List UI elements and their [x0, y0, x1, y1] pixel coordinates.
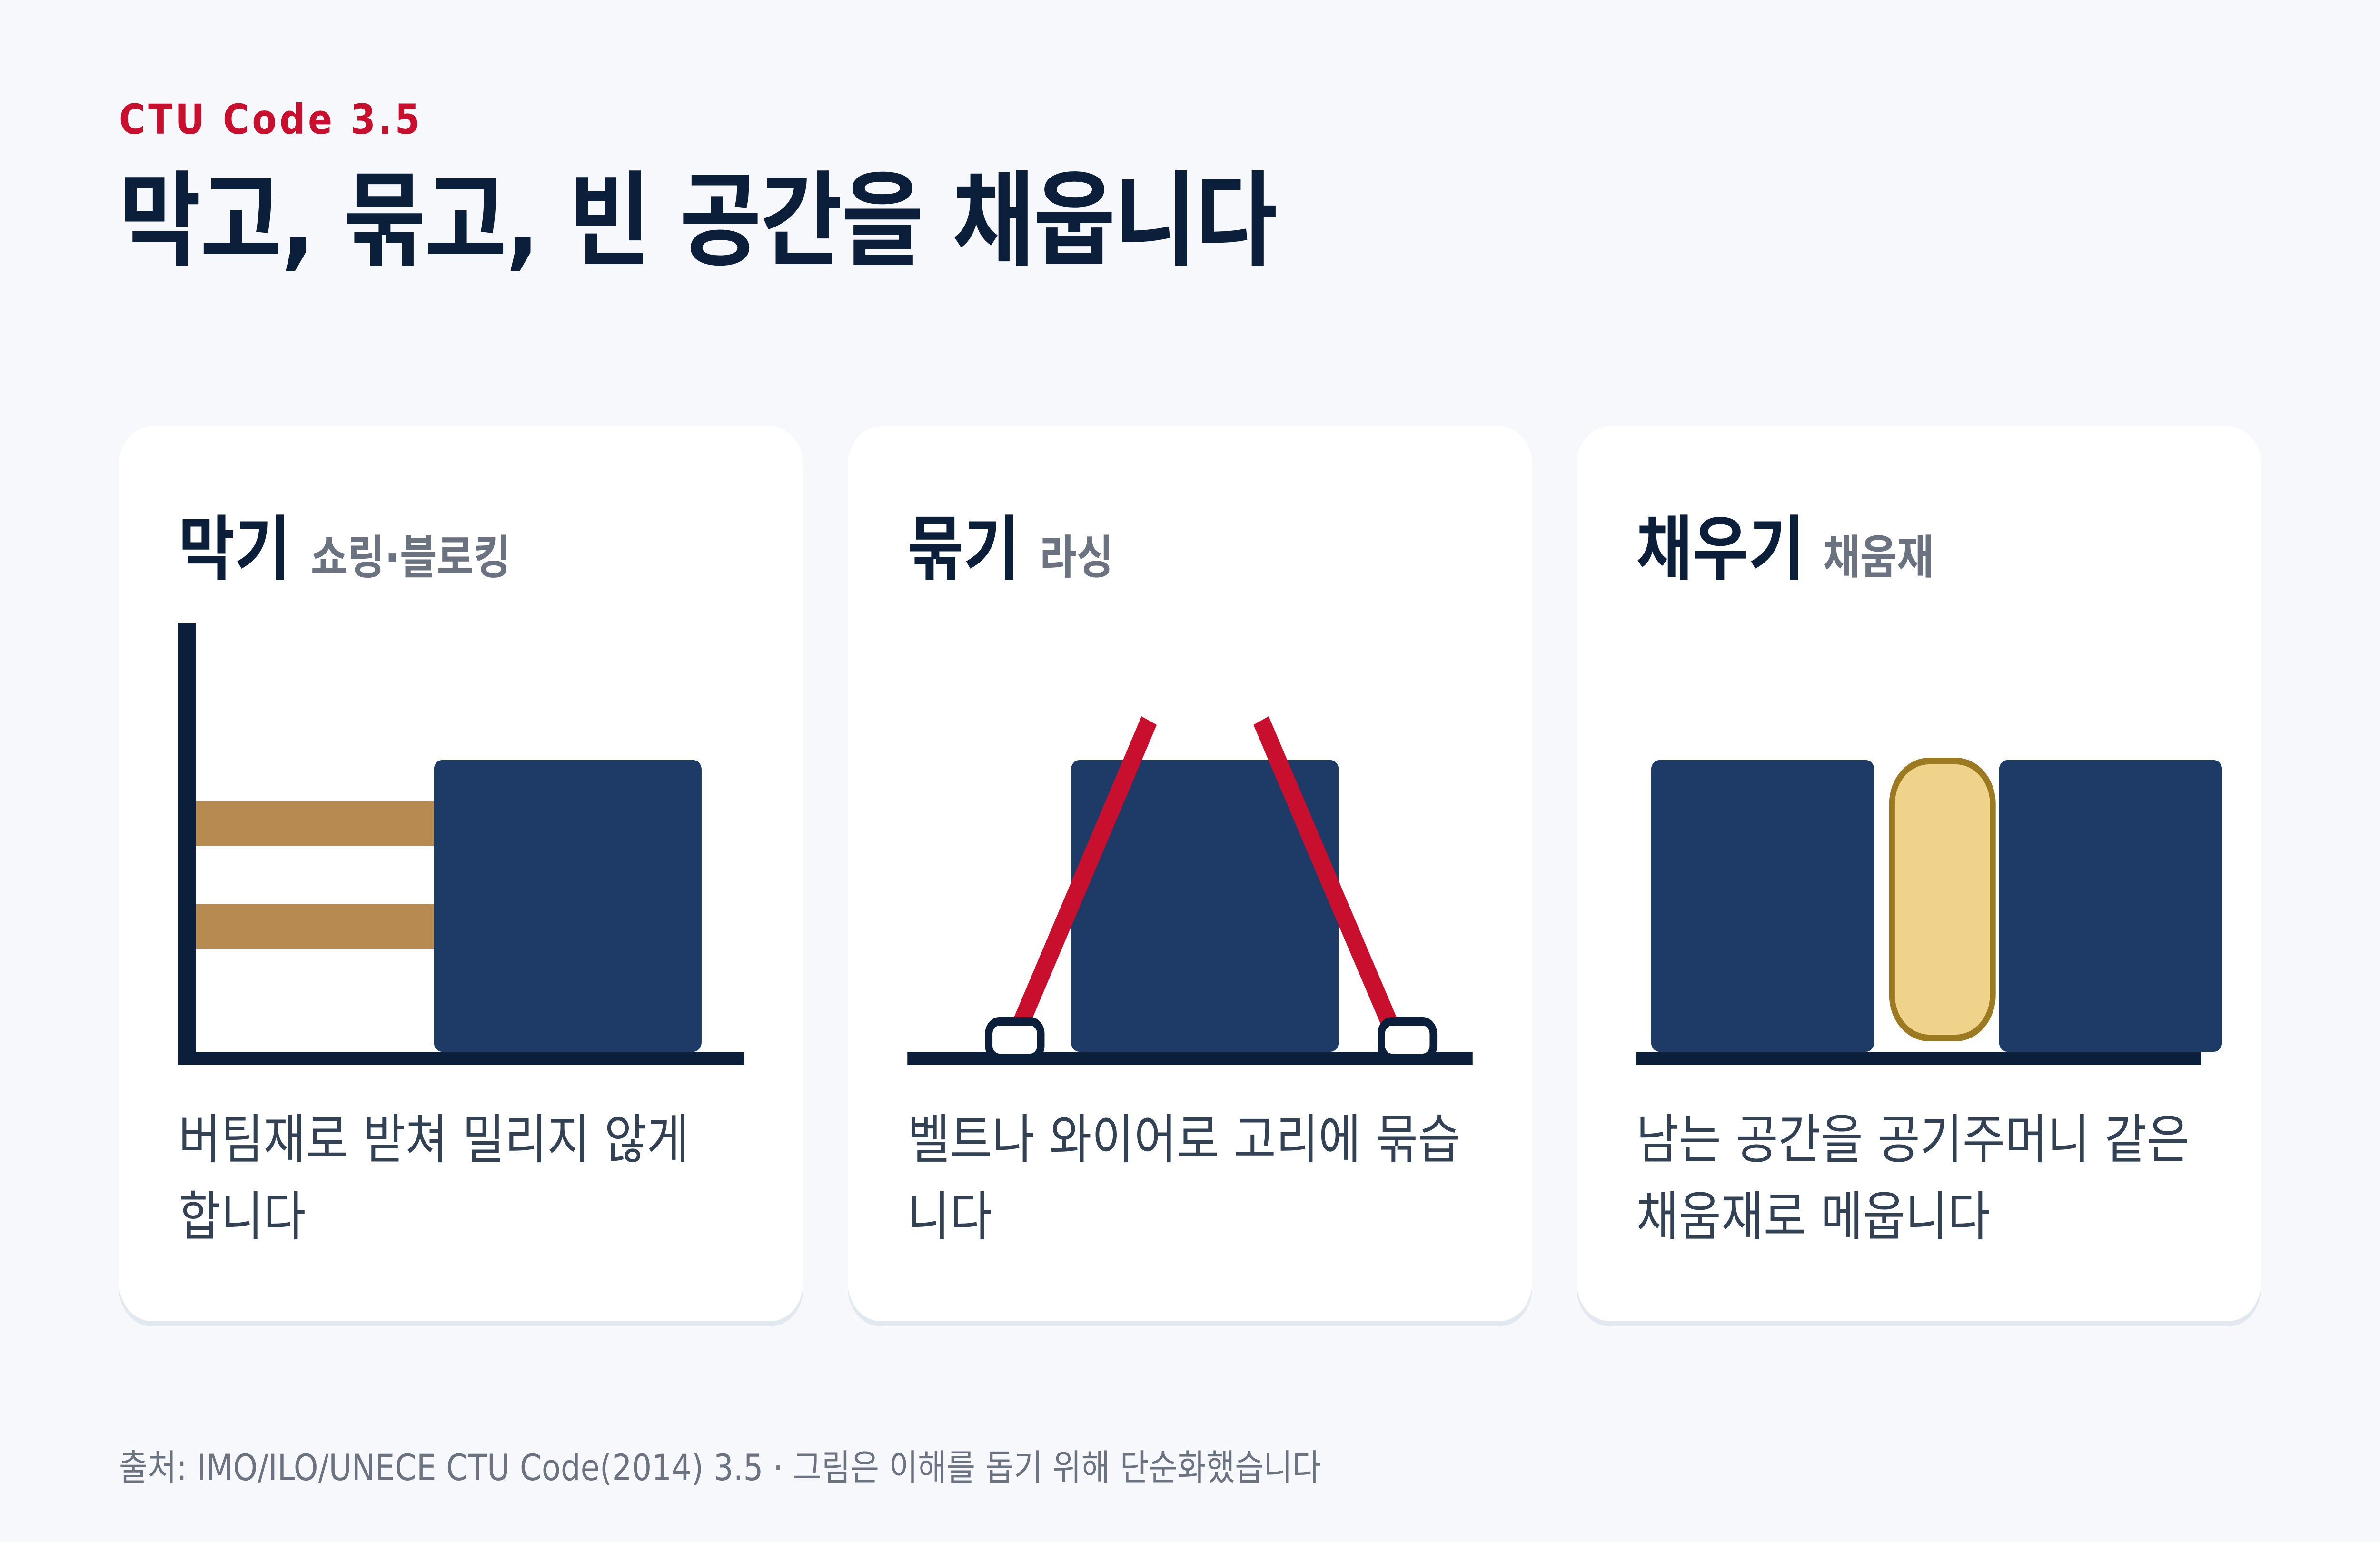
wall and floor [178, 623, 744, 1065]
panel heading: 묶기 라싱: 묶기 [907, 508, 1020, 590]
description text [1636, 1108, 2189, 1248]
panel heading: 채우기 채움재: 채움재 [1823, 531, 1934, 584]
air bag [1892, 761, 1993, 1038]
anchor hooks [989, 1021, 1433, 1058]
panel: 채우기 dunnage [1577, 426, 2261, 1326]
panel heading: 묶기 라싱 [907, 508, 1113, 590]
panel: 막기 shoring and blocking [119, 426, 803, 1326]
floor [1636, 1052, 2202, 1065]
panel heading: 막기 쇼링·블로킹 [178, 508, 511, 590]
description text: 벨트나 와이어로 고리에 묶습 [907, 1108, 1460, 1171]
description text: 채움재로 메웁니다 [1636, 1186, 1990, 1248]
cargo box right [1999, 760, 2222, 1052]
cargo box [434, 760, 702, 1052]
source footnote: 출처: IMO/ILO/UNECE CTU Code(2014) 3.5 · 그림은 이해를 돕기 위해 단순화했습니다 [119, 1447, 1321, 1489]
illustration: dunnage bag between two cargo boxes [1636, 760, 2222, 1065]
description text: 남는 공간을 공기주머니 같은 [1636, 1108, 2189, 1171]
eyebrow: CTU Code 3.5: CTU Code 3.5 [119, 96, 423, 144]
panel heading: 묶기 라싱: 라싱 [1040, 531, 1113, 584]
description text: 니다 [907, 1186, 992, 1248]
timber braces [196, 801, 436, 949]
illustration: cargo braced against a wall with timber [178, 623, 744, 1065]
title: 막고, 묶고, 빈 공간을 채웁니다 [119, 161, 1276, 281]
cargo box left [1651, 760, 1874, 1052]
cargo box [1071, 760, 1339, 1052]
panel heading: 막기 쇼링·블로킹: 막기 [178, 508, 291, 590]
lashing straps [1015, 721, 1396, 1038]
panel heading: 채우기 채움재: 채우기 [1636, 508, 1805, 590]
floor [907, 1052, 1473, 1065]
description text: 버팀재로 받쳐 밀리지 않게 [178, 1108, 689, 1171]
description text [907, 1108, 1460, 1248]
panel heading: 막기 쇼링·블로킹: 쇼링·블로킹 [311, 531, 511, 584]
description text [178, 1108, 689, 1248]
panel: 묶기 lashing [848, 426, 1532, 1326]
illustration: cargo lashed to floor anchors [907, 721, 1473, 1065]
panel heading: 채우기 채움재 [1636, 508, 1934, 590]
description text: 합니다 [178, 1186, 306, 1248]
